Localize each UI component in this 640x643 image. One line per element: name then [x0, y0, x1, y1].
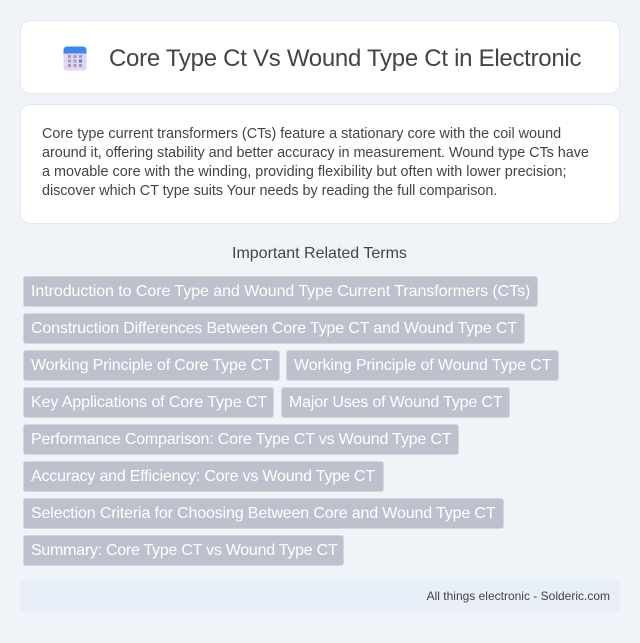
title: Core Type Ct Vs Wound Type Ct in Electronic	[109, 45, 581, 72]
tag: key applications	[23, 387, 274, 418]
tag: major uses	[281, 387, 510, 418]
panel: title header	[20, 20, 620, 94]
panel: intro paragraph	[20, 104, 620, 224]
icon: calendar	[64, 46, 86, 70]
text block: intro paragraph: Core type current transformers (CTs) feature a stationary core with the coil wound	[42, 126, 561, 142]
tag: working principle core: Working Principle of Core Type CT	[31, 357, 272, 374]
tag: selection criteria	[23, 498, 504, 529]
text block: intro paragraph: a movable core with the winding, providing flexibility but often with lower precision;	[42, 164, 566, 180]
tag: performance comparison: Performance Comparison: Core Type CT vs Wound Type CT	[31, 431, 451, 448]
text block: intro paragraph	[42, 126, 589, 199]
heading: important related terms: Important Related Terms	[232, 245, 407, 262]
tag: construction differences	[23, 313, 525, 344]
tag: introduction	[23, 276, 538, 307]
tag: accuracy and efficiency	[23, 461, 384, 492]
text block: intro paragraph: around it, offering stability and better accuracy in measurement. Wound type CTs have	[42, 145, 589, 161]
footer	[20, 579, 620, 613]
tag: performance comparison	[23, 424, 459, 455]
panel: related term tags	[23, 276, 559, 566]
tag: summary: Summary: Core Type CT vs Wound Type CT	[31, 542, 337, 559]
tag: working principle wound: Working Principle of Wound Type CT	[294, 357, 551, 374]
tag: accuracy and efficiency: Accuracy and Efficiency: Core vs Wound Type CT	[31, 468, 375, 485]
footer text: All things electronic - Solderic.com	[427, 589, 610, 603]
tag: introduction: Introduction to Core Type and Wound Type Current Transformers (CTs)	[31, 283, 530, 300]
tag: summary	[23, 535, 344, 566]
tag: construction differences: Construction Differences Between Core Type CT and Wound Type CT	[31, 320, 517, 337]
tag: working principle wound	[286, 350, 559, 381]
tag: key applications: Key Applications of Core Type CT	[31, 394, 267, 411]
tag: major uses: Major Uses of Wound Type CT	[289, 394, 502, 411]
text block: intro paragraph: discover which CT type suits Your needs by reading the full comparison.	[42, 183, 497, 199]
tag: selection criteria: Selection Criteria for Choosing Between Core and Wound Type CT	[31, 505, 495, 522]
tag: working principle core	[23, 350, 280, 381]
